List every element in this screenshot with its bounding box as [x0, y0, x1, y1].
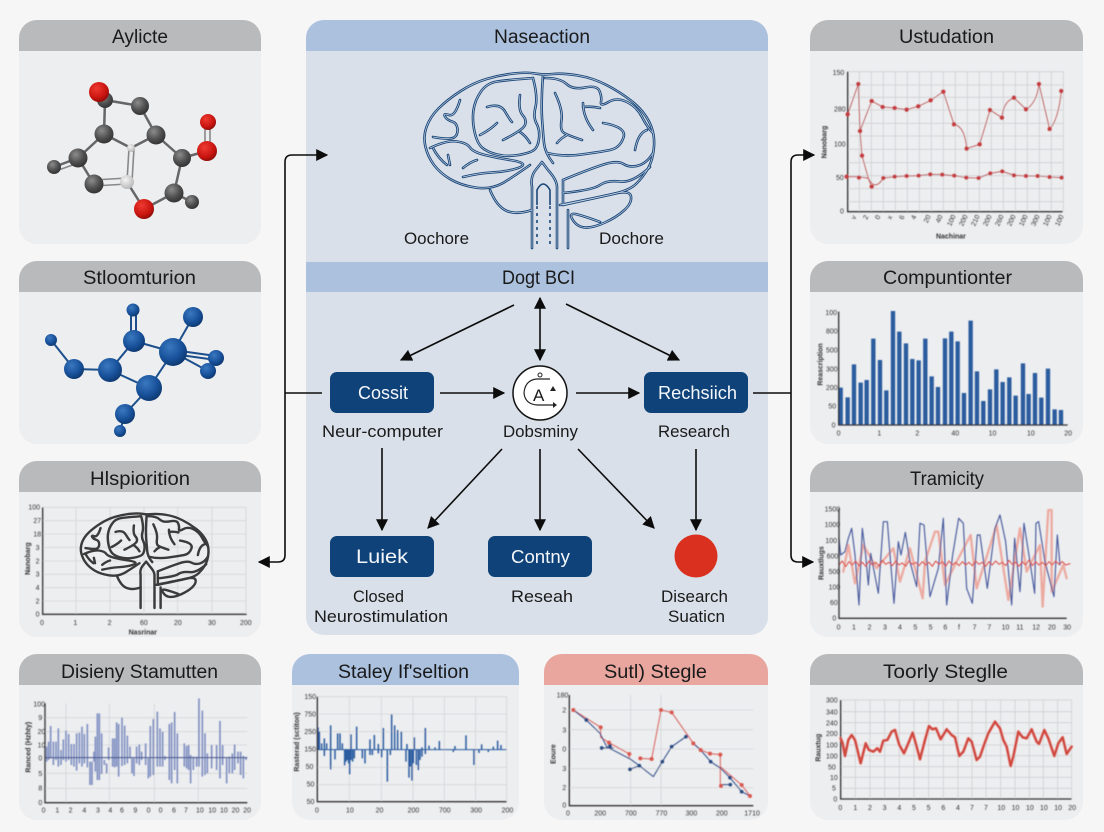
chart: red line: 5 [832, 786, 836, 793]
chart: blue spikes: 10 [196, 808, 204, 815]
chart: red and blue paths: 0 [562, 746, 566, 753]
chart: blue deviation spikes [294, 694, 513, 815]
panel: Compuntionter bar chart: Compuntionter [883, 268, 1013, 289]
chart: blue and red signals: 60 [830, 600, 838, 607]
chart: red scatter lines: v [850, 214, 858, 221]
chart: blue spikes: 9 [38, 715, 42, 722]
chart: blue and red signals: 1 [852, 624, 856, 631]
arrow: left bracket connector [259, 155, 327, 562]
icon: blue brain outline [424, 73, 654, 248]
label: Disearch Suaticn: Suaticn [668, 607, 725, 626]
node: red circle [674, 534, 718, 578]
chart: red scatter lines [822, 70, 1066, 241]
label: Closed Neurostimulation: Closed [353, 587, 404, 606]
chart: blue and red signals: 0 [832, 616, 836, 623]
node: Cossit [330, 372, 434, 413]
chart: blue and red signals: 6 [943, 624, 947, 631]
chart: red scatter lines: 0 [840, 208, 844, 215]
chart: brain over grid: 2 [36, 598, 40, 605]
heading: Dogt BCI [306, 262, 768, 292]
chart: red line: 10 [1040, 805, 1048, 812]
chart: blue bars: 40 [951, 430, 959, 437]
chart: blue deviation spikes: 20 [376, 808, 384, 815]
chart: red line: 20 [1068, 805, 1076, 812]
chart: blue and red signals: Rauxtlugs [818, 546, 825, 580]
chart: blue spikes: 7 [184, 808, 188, 815]
chart: red line: 340 [826, 709, 838, 716]
chart: blue spikes: Ranced (Hzhty) [26, 722, 33, 773]
panel: Disieny Stamutten chart [19, 654, 261, 820]
chart: red line: 1 [853, 805, 857, 812]
chart: blue and red signals: 7 [973, 624, 977, 631]
chart: blue and red signals: f [958, 624, 960, 631]
chart: blue spikes: 4 [82, 808, 86, 815]
chart: red and blue paths: 1710 [744, 811, 760, 818]
chart: blue and red signals: 5 [929, 624, 933, 631]
chart: red and blue paths: 770 [656, 811, 667, 818]
panel: central diagram [306, 20, 768, 635]
panel: Ustudation line chart: Ustudation [899, 27, 994, 48]
chart: red scatter lines: 100 [1042, 214, 1054, 227]
chart: red scatter lines: 150 [833, 70, 844, 77]
chart: red scatter lines: 280 [834, 107, 846, 114]
chart: brain over grid: 0 [36, 612, 40, 619]
chart: red scatter lines: x [886, 214, 894, 221]
chart: red and blue paths: 2 [562, 708, 566, 715]
chart: blue deviation spikes: 0 [315, 808, 319, 815]
chart: blue and red signals: 0 [837, 624, 841, 631]
chart: red line: 3 [883, 805, 887, 812]
chart: brain over grid: 3 [36, 572, 40, 579]
chart: blue bars: 10 [1027, 430, 1035, 437]
chart: blue deviation spikes: 50 [306, 764, 314, 771]
chart: blue spikes: 6 [172, 808, 176, 815]
chart: blue and red signals: 100 [825, 538, 837, 545]
chart: blue bars: 500 [826, 347, 838, 354]
chart: red line: 5 [927, 805, 931, 812]
chart: brain over grid: 200 [240, 620, 252, 627]
chart: blue and red signals: 4 [898, 624, 902, 631]
chart: red scatter lines: 50 [836, 175, 844, 182]
chart: blue spikes: 20 [232, 808, 240, 815]
chart: red scatter lines: 200 [1006, 214, 1018, 227]
chart: red and blue paths: 3 [562, 727, 566, 734]
chart: blue and red signals: 5 [913, 624, 917, 631]
chart: blue and red signals: 12 [1032, 624, 1040, 631]
panel: Sutl) Stegle chart [544, 654, 768, 820]
chart: blue spikes: 20 [243, 808, 251, 815]
chart: blue bars: 2 [915, 430, 919, 437]
chart: blue and red signals: 20 [1048, 624, 1056, 631]
chart: red line: Rauxtug [816, 734, 823, 762]
chart: brain over grid: 60 [140, 620, 148, 627]
chart: blue spikes [26, 698, 251, 815]
chart: blue bars: 0 [837, 430, 841, 437]
chart: red line: 10 [1054, 805, 1062, 812]
chart: blue deviation spikes: 250 [304, 729, 316, 736]
chart: red and blue paths: 200 [716, 811, 728, 818]
node: Contny: Contny [511, 547, 570, 567]
chart: blue spikes: 20 [38, 729, 46, 736]
label: Neur-computer: Neur-computer [322, 422, 443, 441]
chart: red scatter lines: 210 [970, 214, 982, 227]
chart: blue deviation spikes: 750 [304, 711, 316, 718]
panel: Tramicity signal chart [810, 461, 1083, 637]
chart: blue spikes: 0 [147, 808, 151, 815]
chart: blue deviation spikes: 150 [304, 694, 316, 701]
chart: blue spikes: 6 [120, 808, 124, 815]
panel: Tramicity signal chart: Tramicity [910, 469, 984, 490]
chart: blue and red signals: 600 [827, 553, 838, 560]
chart: red and blue paths: 180 [557, 692, 568, 699]
chart: brain over grid: 100 [28, 505, 40, 512]
heading: Dogt BCI: Dogt BCI [502, 268, 575, 289]
icon: blue molecule [45, 304, 224, 437]
chart: brain over grid: 30 [208, 620, 216, 627]
chart: blue bars: 20 [1064, 430, 1072, 437]
chart: red line: 10 [997, 805, 1005, 812]
chart: red scatter lines: 100 [946, 214, 958, 227]
chart: red line: 7 [970, 805, 974, 812]
chart: blue spikes: 2 [69, 808, 73, 815]
node: Rechsiich [644, 372, 748, 413]
label: Dochore: Dochore [599, 229, 664, 248]
chart: blue and red signals: 1500 [825, 506, 840, 513]
chart: brain over grid: 3 [36, 545, 40, 552]
chart: blue and red signals: 7 [987, 624, 991, 631]
label: Closed Neurostimulation [314, 587, 448, 626]
chart: blue deviation spikes: 200 [502, 808, 513, 815]
chart: blue bars: 300 [826, 366, 838, 373]
chart: red and blue paths: 200 [594, 811, 606, 818]
chart: red and blue paths: 300 [686, 811, 697, 818]
node: Luiek: Luiek [356, 547, 409, 568]
chart: blue and red signals: 30 [1063, 624, 1071, 631]
chart: red scatter lines: 2 [862, 214, 870, 221]
panel: Stloomturion molecule: Stloomturion [83, 268, 196, 289]
label: Disearch Suaticn: Disearch [661, 587, 728, 606]
chart: brain over grid: 18 [33, 531, 41, 538]
label: Dobsminy: Dobsminy [503, 422, 578, 441]
chart: red and blue paths: 700 [625, 811, 637, 818]
panel: Toorly Steglle line chart [810, 654, 1083, 820]
arrows: central diagram connections [382, 298, 696, 530]
chart: blue and red signals: 3 [883, 624, 887, 631]
panel: central diagram: Naseaction [494, 27, 590, 48]
chart: red line: 5 [912, 805, 916, 812]
chart: blue and red signals: 1000 [825, 522, 840, 529]
chart: blue bars: 1 [877, 430, 881, 437]
chart: brain over grid [25, 505, 252, 636]
chart: red scatter lines: 100 [834, 141, 846, 148]
chart: blue spikes: 4 [108, 808, 112, 815]
chart: red and blue paths: 0 [562, 803, 566, 810]
chart: blue bars: 50 [828, 403, 836, 410]
chart: red line: 4 [897, 805, 901, 812]
chart: red line [816, 698, 1076, 812]
label: Reseah: Reseah [511, 587, 573, 606]
panel: Aylicte molecule: Aylicte [112, 27, 168, 48]
panel: Hlspiorition brain chart: Hlspiorition [90, 469, 190, 490]
chart: red scatter lines: 40 [935, 214, 945, 224]
icon: grey and red molecule [47, 82, 217, 219]
node: circular icon: A [533, 386, 545, 405]
chart: red scatter lines: 300 [1030, 214, 1042, 227]
chart: red and blue paths: Eoure [551, 744, 558, 764]
chart: blue deviation spikes: 50 [307, 799, 315, 806]
chart: red scatter lines: 4 [910, 214, 918, 221]
chart: blue and red signals [818, 506, 1071, 631]
chart: blue bars [818, 310, 1072, 437]
chart: red line: 10 [830, 775, 838, 782]
chart: blue spikes: 8 [38, 786, 42, 793]
chart: blue deviation spikes: 300 [470, 808, 482, 815]
panel: Toorly Steglle line chart: Toorly Steglle [883, 662, 1008, 683]
chart: red line: 0 [838, 805, 842, 812]
chart: blue bars: Reascription [818, 343, 825, 386]
node: Luiek [330, 536, 434, 577]
label: Oochore: Oochore [404, 229, 469, 248]
chart: red line: 6 [941, 805, 945, 812]
chart: blue spikes: 100 [33, 702, 45, 709]
chart: brain over grid: Nasrinar [129, 629, 157, 636]
chart: red scatter lines: 6 [898, 214, 906, 221]
chart: blue spikes: 1 [55, 808, 59, 815]
chart: red and blue paths [551, 692, 760, 818]
chart: brain over grid: 1 [73, 620, 77, 627]
panel: Aylicte molecule [19, 20, 261, 244]
chart: blue spikes: 0 [42, 808, 46, 815]
chart: blue spikes: 0 [38, 756, 42, 763]
chart: red line: 240 [826, 720, 838, 727]
label: Closed Neurostimulation: Neurostimulation [314, 607, 448, 626]
chart: blue spikes: 9 [133, 808, 137, 815]
chart: blue and red signals: 500 [829, 569, 840, 576]
chart: blue deviation spikes: 200 [408, 808, 419, 815]
node: Contny [488, 536, 592, 577]
chart: brain over grid: 27 [33, 518, 41, 525]
node: Rechsiich: Rechsiich [658, 383, 737, 403]
chart: blue deviation spikes: Rasterad (sctiton) [294, 712, 301, 772]
chart: red line: 100 [826, 742, 838, 749]
chart: blue bars: 10 [989, 430, 997, 437]
chart: red line: 4 [956, 805, 960, 812]
chart: blue spikes: 3 [96, 808, 100, 815]
label: Disearch Suaticn [661, 587, 728, 626]
chart: blue spikes: 10 [38, 743, 46, 750]
chart: red line: 10 [1026, 805, 1034, 812]
chart: red line: 100 [826, 753, 838, 760]
label: Research: Research [658, 422, 730, 441]
panel: Disieny Stamutten chart: Disieny Stamutten [61, 662, 218, 683]
chart: red line: 7 [984, 805, 988, 812]
chart: red and blue paths: 0 [566, 811, 570, 818]
chart: red and blue paths: 3 [562, 766, 566, 773]
chart: blue spikes: 10 [220, 808, 228, 815]
panel: Staley If'seltion chart [292, 654, 519, 820]
chart: blue and red signals: 10 [1002, 624, 1010, 631]
chart: red scatter lines: 100 [1018, 214, 1030, 227]
chart: blue spikes: 5 [38, 771, 42, 778]
chart: red scatter lines: 200 [958, 214, 970, 227]
chart: red scatter lines: Nanobarg [822, 126, 829, 158]
chart: blue and red signals: 11 [1016, 624, 1024, 631]
chart: blue bars: 0 [832, 422, 836, 429]
chart: red scatter lines: Nachinar [936, 234, 966, 241]
chart: blue and red signals: 2 [868, 624, 872, 631]
chart: brain over grid: 4 [36, 585, 40, 592]
panel: Ustudation line chart [810, 20, 1083, 244]
chart: red line: 50 [828, 764, 836, 771]
chart: red scatter lines: 20 [923, 214, 933, 224]
chart: blue spikes: 0 [38, 800, 42, 807]
node: Cossit: Cossit [358, 383, 408, 403]
chart: red line: 10 [1012, 805, 1020, 812]
node: circular icon [513, 366, 567, 420]
chart: red scatter lines: 260 [994, 214, 1006, 227]
chart: blue spikes: 0 [159, 808, 163, 815]
panel: Hlspiorition brain chart [19, 461, 261, 637]
chart: blue deviation spikes: 10 [346, 808, 354, 815]
chart: red scatter lines: 0 [874, 214, 882, 221]
chart: red line: 2 [868, 805, 872, 812]
chart: brain over grid: 2 [36, 558, 40, 565]
chart: blue and red signals: 100 [829, 585, 840, 592]
panel: Compuntionter bar chart [810, 261, 1083, 444]
chart: blue deviation spikes: 150 [304, 747, 316, 754]
panel: Staley If'seltion chart: Staley If'seltion [338, 662, 469, 683]
chart: red line: 0 [833, 796, 837, 803]
chart: red and blue paths: 2 [562, 785, 566, 792]
arrow: right bracket connector [753, 155, 814, 562]
chart: blue bars: 200 [826, 385, 838, 392]
chart: blue bars: 100 [825, 310, 837, 317]
chart: blue deviation spikes: 50 [307, 782, 315, 789]
panel: Sutl) Stegle chart: Sutl) Stegle [604, 662, 707, 683]
chart: blue deviation spikes: 700 [439, 808, 451, 815]
chart: red line: 300 [826, 698, 838, 705]
chart: blue spikes: 10 [208, 808, 216, 815]
chart: brain over grid: 20 [174, 620, 182, 627]
chart: brain over grid: Nanobarg [25, 542, 32, 575]
chart: red line: 200 [826, 731, 838, 738]
chart: brain over grid: 0 [40, 620, 44, 627]
panel: Stloomturion molecule [19, 261, 261, 444]
chart: blue bars: 800 [826, 329, 838, 336]
chart: brain over grid: 2 [108, 620, 112, 627]
chart: red scatter lines: 200 [982, 214, 994, 227]
chart: red scatter lines: 100 [1054, 214, 1066, 227]
